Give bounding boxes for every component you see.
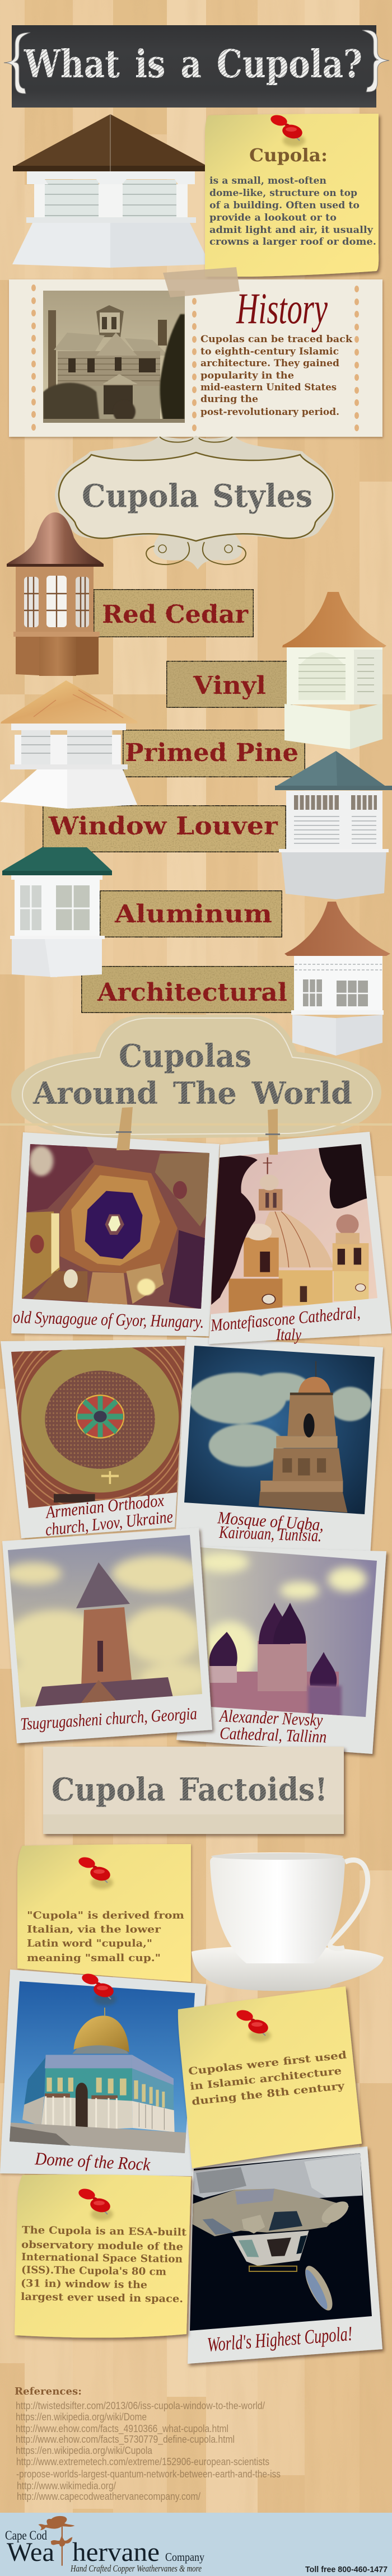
photo: sepia house <box>43 291 185 423</box>
logo: Cape Cod Weathervane Company: Company <box>165 2550 204 2564</box>
panel: polaroid, Alexander Nevsky Cathedral <box>176 1546 386 1754</box>
label: architectural <box>81 966 300 1013</box>
caption: Alexander Nevsky <box>218 1706 323 1730</box>
panel: cupolas around the world cloud <box>11 1015 381 1139</box>
text block: references <box>15 2386 281 2502</box>
logo: Cape Cod Weathervane Company: Wea <box>7 2537 54 2567</box>
text block: definition: of a building. Often used to <box>209 200 360 211</box>
text block: definition: provide a lookout or to <box>209 212 337 223</box>
photo: Mosque of Uqba <box>183 1344 377 1518</box>
label: architectural: Architectural <box>97 978 287 1007</box>
caption: Montefiascone Cathedral, <box>209 1303 361 1335</box>
icon: red pin <box>235 2008 271 2042</box>
text block: ESA module: (31 in) window is the <box>21 2278 147 2291</box>
text block: etymology: Italian, via the lower <box>27 1924 161 1935</box>
text block: definition: crowns a larger roof or dome. <box>209 236 376 247</box>
text block: definition: is a small, most-often <box>209 175 326 186</box>
panel: sticky note, ESA module <box>15 2174 191 2338</box>
text block: definition: dome-like, structure on top <box>209 188 357 198</box>
caption: Mosque of Uqba, <box>217 1508 324 1534</box>
text block: first used: in Islamic architecture <box>189 2065 342 2093</box>
title chalkboard <box>4 25 389 108</box>
icon: red pin <box>77 2187 113 2220</box>
text block: first used: during the 8th century <box>191 2080 346 2108</box>
panel: polaroid, World's Highest Cupola <box>185 2146 382 2364</box>
photo: Armenian church dome <box>11 1346 185 1508</box>
icon: window louver cupola <box>275 751 392 899</box>
panel: polaroid, old synagogue of Gyor <box>11 1132 220 1336</box>
text block: history: mid-eastern United States <box>200 382 337 393</box>
icon: red pin <box>81 1972 116 2005</box>
heading banner: cupola factoids: Cupola Factoids! <box>52 1771 328 1808</box>
heading: Cupola: Cupola: <box>249 144 328 166</box>
text block: history: during the <box>200 394 258 404</box>
heading text: Cupola Styles <box>82 478 312 515</box>
logo: Cape Cod Weathervane Company: Cape Cod <box>5 2528 47 2542</box>
text: toll free number: Toll free 800-460-1477 <box>305 2565 388 2574</box>
text block: references: -propose-worlds-largest-quantum-network-between-earth-and-the-iss <box>16 2468 281 2480</box>
label: aluminum: Aluminum <box>114 900 272 928</box>
text block: history: to eighth-century Islamic <box>200 346 339 357</box>
heading text: Cupolas <box>119 1038 251 1075</box>
text block: definition: admit light and air, it usually <box>209 225 373 235</box>
icon: aluminum cupola <box>2 847 112 977</box>
panel: polaroid, Dome of the Rock <box>0 1970 206 2176</box>
text block: etymology: Latin word "cupula," <box>27 1938 152 1949</box>
text block: references: http://www.wikimedia.org/ <box>17 2480 116 2491</box>
text block: definition <box>209 175 376 247</box>
label: red cedar: Red Cedar <box>102 600 249 629</box>
text block: references: References: <box>15 2386 82 2397</box>
text block: ESA module: largest ever used in space. <box>21 2291 183 2305</box>
icon: red pin <box>269 113 305 147</box>
caption <box>217 1508 324 1545</box>
caption: old Synagogue of Gyor, Hungary. <box>13 1307 204 1332</box>
text block: references: http://www.extremetech.com/extreme/152906-european-scientists <box>16 2456 269 2467</box>
logo: Cape Cod Weathervane Company <box>5 2528 204 2574</box>
photo: Montefiascone Cathedral <box>208 1141 382 1318</box>
caption <box>44 1490 174 1539</box>
panel: polaroid, Mosque of Uqba <box>175 1337 383 1565</box>
caption: Armenian Orthodox <box>44 1490 165 1522</box>
text block: history: post-revolutionary period. <box>200 407 339 417</box>
icon: white teacup and saucer <box>192 1852 384 1991</box>
heading plaque: cupola styles <box>55 436 335 570</box>
text block: ESA module: (ISS).The Cupola's 80 cm <box>21 2264 166 2278</box>
icon: architectural cupola <box>284 902 390 1056</box>
caption: church, Lvov, Ukraine <box>44 1506 174 1539</box>
label: primed pine: Primed Pine <box>125 739 298 767</box>
heading: history: History <box>236 284 328 333</box>
icon: weathervane <box>38 2516 74 2566</box>
text block: history: Cupolas can be traced back <box>200 334 353 344</box>
logo: Cape Cod Weathervane Company: Hand Crafted Copper Weathervanes & more <box>70 2563 202 2574</box>
icon: right brace <box>362 30 389 92</box>
panel: polaroid, Tsugrugasheni church <box>2 1528 212 1743</box>
perforation dots <box>31 284 359 431</box>
photo: ISS cupola <box>185 2150 375 2334</box>
icon: red cedar cupola <box>7 512 104 676</box>
tape <box>163 267 240 297</box>
icon: primed pine cupola <box>0 680 137 809</box>
icon: clothespin 2 <box>265 1109 280 1155</box>
panel: sticky note, etymology <box>17 1844 191 1982</box>
icon: left brace <box>4 32 30 94</box>
text block: history: popularity in the <box>200 370 294 381</box>
text block: references: https://en.wikipedia.org/wiki/Dome <box>16 2411 147 2423</box>
panel: cupola definition sticky note <box>205 113 379 277</box>
photo: synagogue dome <box>20 1142 212 1310</box>
caption: Kairouan, Tunisia. <box>218 1522 322 1545</box>
photo: Dome of the Rock <box>7 1978 198 2156</box>
panel: cupolas around the world cloud: Around The World <box>32 1075 352 1111</box>
text block: first used: Cupolas were first used <box>188 2049 347 2078</box>
text block: first used <box>188 2049 347 2108</box>
rope <box>0 1123 392 1126</box>
label: window louver: Window Louver <box>48 812 278 841</box>
text block: references: https://en.wikipedia.org/wiki/Cupola <box>16 2445 153 2456</box>
text block: etymology: "Cupola" is derived from <box>27 1910 184 1921</box>
label: vinyl <box>166 661 292 708</box>
text block: ESA module: International Space Station <box>21 2251 183 2265</box>
text block: history: architecture. They gained <box>200 358 339 368</box>
footer <box>0 2513 392 2576</box>
label: aluminum <box>100 890 282 937</box>
icon: clothespin 1 <box>116 1107 133 1150</box>
caption: Tsugrugasheni church, Georgia <box>20 1704 198 1734</box>
panel: polaroid, Armenian Orthodox church <box>0 1340 186 1540</box>
label: vinyl: Vinyl <box>193 671 266 700</box>
text block: etymology <box>27 1910 184 1964</box>
heading banner: cupola factoids <box>43 1747 344 1834</box>
text block: etymology: meaning "small cup." <box>27 1952 161 1964</box>
caption: Dome of the Rock <box>34 2148 151 2174</box>
logo: Cape Cod Weathervane Company: hervane <box>72 2537 160 2567</box>
text block: references: http://www.ehow.com/facts_5730779_define-cupola.html <box>16 2434 235 2446</box>
text block: ESA module <box>21 2224 187 2305</box>
panel: sticky note, first used <box>178 1986 362 2168</box>
icon: vinyl cupola <box>282 592 386 749</box>
text block: references: http://www.capecodweathervanecompany.com/ <box>17 2491 200 2502</box>
icon: main cupola <box>12 114 210 268</box>
caption: Italy <box>276 1326 302 1344</box>
caption <box>218 1706 327 1747</box>
icon: red pin <box>77 1855 113 1889</box>
label: red cedar <box>94 589 254 637</box>
panel: history paper <box>9 267 382 437</box>
label: window louver <box>43 805 286 852</box>
text block: ESA module: The Cupola is an ESA-built <box>22 2224 187 2238</box>
label: primed pine <box>123 730 305 777</box>
caption <box>209 1303 361 1344</box>
text block: references: http://www.ehow.com/facts_4910366_what-cupola.html <box>16 2423 228 2435</box>
text block: ESA module: observatory module of the <box>21 2239 183 2253</box>
photo: Tsugrugasheni church <box>3 1532 210 1711</box>
caption: Cathedral, Tallinn <box>220 1723 327 1747</box>
text block: references: http://twistedsifter.com/2013/06/iss-cupola-window-to-the-world/ <box>16 2400 265 2411</box>
text block: history <box>200 334 353 417</box>
photo: Alexander Nevsky Cathedral <box>199 1546 381 1719</box>
panel: polaroid, Montefiascone Cathedral <box>208 1132 391 1344</box>
